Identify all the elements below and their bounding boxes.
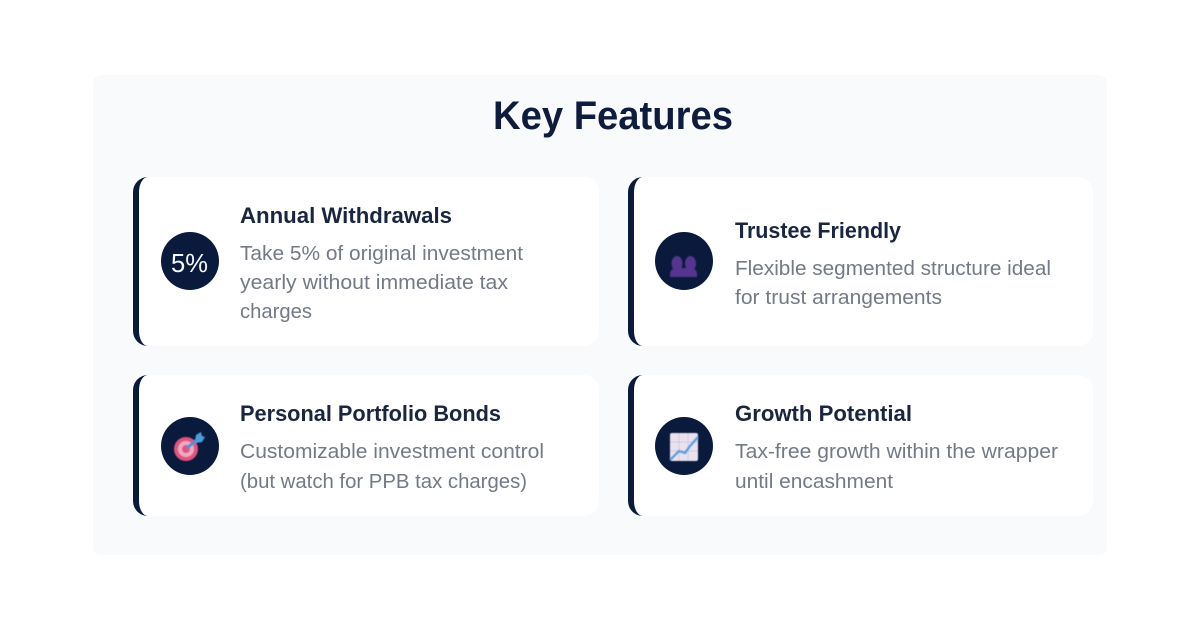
text: annual withdrawals description (240, 243, 523, 323)
card: personal portfolio bonds (133, 375, 599, 516)
icon: rising chart (655, 417, 713, 475)
text: growth potential description (735, 441, 1058, 493)
icon: target with dart (161, 417, 219, 475)
text: trustee friendly description (735, 258, 1051, 309)
heading: annual withdrawals: Annual Withdrawals (240, 203, 452, 228)
text: trustee friendly description: Flexible segmented structure ideal (735, 258, 1051, 280)
text: annual withdrawals description: Take 5% of original investment (240, 243, 523, 265)
text: annual withdrawals description: yearly without immediate tax (240, 272, 508, 294)
heading: growth potential: Growth Potential (735, 401, 912, 426)
card: trustee friendly (628, 177, 1093, 346)
text: annual withdrawals description: charges (240, 301, 312, 323)
text: growth potential description: until encashment (735, 471, 893, 493)
text: growth potential description: Tax-free growth within the wrapper (735, 441, 1058, 463)
card: annual withdrawals (133, 177, 599, 346)
title: Key Features (493, 94, 733, 138)
panel: key features (93, 75, 1107, 555)
icon: 5% badge: 5% (171, 248, 208, 278)
heading: trustee friendly: Trustee Friendly (735, 218, 902, 243)
icon: people silhouettes (655, 232, 713, 290)
icon: 5% badge (161, 232, 219, 290)
text: personal portfolio bonds description: Customizable investment control (240, 441, 544, 463)
heading: personal portfolio bonds: Personal Portfolio Bonds (240, 401, 501, 426)
card: growth potential (628, 375, 1093, 516)
text: trustee friendly description: for trust arrangements (735, 287, 942, 309)
text: personal portfolio bonds description: (but watch for PPB tax charges) (240, 471, 527, 493)
text: personal portfolio bonds description (240, 441, 544, 493)
